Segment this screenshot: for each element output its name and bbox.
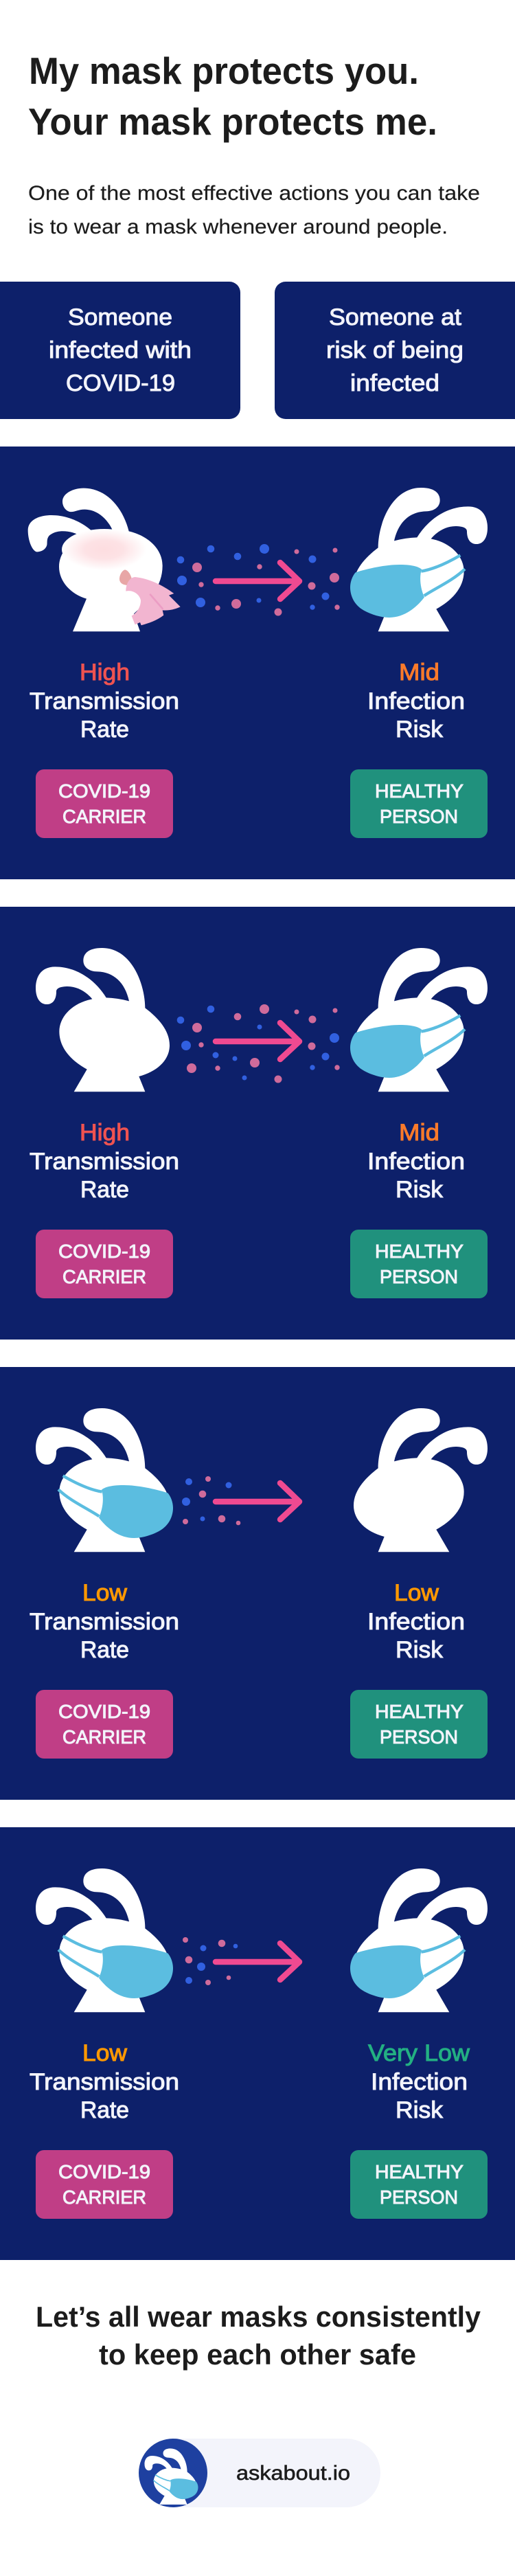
footer brand pill	[139, 2439, 380, 2507]
right risk label: Risk	[396, 1177, 444, 1203]
right risk label	[367, 1120, 465, 1203]
right risk label: Infection	[367, 1149, 465, 1175]
right risk label: Mid	[399, 659, 439, 686]
badge: healthy person: HEALTHY	[375, 780, 464, 802]
left rate label	[30, 1120, 179, 1203]
left rate label: Low	[82, 2040, 127, 2066]
panel: low transmission, low infection	[0, 1367, 515, 1800]
badge: covid-19 carrier: CARRIER	[62, 1266, 146, 1287]
left rate label: Transmission	[30, 1609, 179, 1635]
badge: healthy person: HEALTHY	[375, 1701, 464, 1722]
card: someone infected: infected with	[49, 337, 192, 363]
title: My mask protects you.	[29, 49, 419, 92]
panel: low transmission, very low infection	[0, 1827, 515, 2260]
badge: healthy person	[350, 769, 488, 838]
intro text: is to wear a mask whenever around people.	[28, 216, 448, 238]
panel: high transmission, mid infection (no carrier mask)	[0, 907, 515, 1340]
card: someone at risk: Someone at	[329, 304, 462, 330]
left rate label: High	[80, 659, 130, 686]
icon: masked healthy rabbit	[350, 948, 488, 1092]
icon: masked healthy rabbit	[350, 1868, 488, 2012]
icon: masked carrier rabbit	[36, 1868, 173, 2012]
right risk label: Infection	[367, 688, 465, 714]
badge: covid-19 carrier	[36, 1230, 173, 1298]
badge: covid-19 carrier: COVID-19	[58, 2161, 150, 2182]
right risk label: Low	[394, 1580, 439, 1606]
badge: healthy person: PERSON	[380, 2187, 458, 2208]
card: someone at risk: risk of being	[326, 337, 464, 363]
badge: covid-19 carrier: COVID-19	[58, 1241, 150, 1262]
right risk label: Mid	[399, 1120, 439, 1146]
badge: healthy person	[350, 1230, 488, 1298]
right risk label: Infection	[371, 2069, 468, 2095]
left rate label: High	[80, 1120, 130, 1146]
left rate label: Rate	[80, 716, 129, 743]
right risk label	[367, 1580, 465, 1663]
left rate label: Transmission	[30, 1149, 179, 1175]
icon: unmasked healthy rabbit	[354, 1408, 488, 1552]
left rate label: Rate	[80, 1177, 129, 1203]
card: someone at risk	[275, 282, 515, 419]
closing message: Let’s all wear masks consistently	[36, 2301, 481, 2333]
badge: covid-19 carrier	[36, 769, 173, 838]
closing message: to keep each other safe	[99, 2338, 416, 2371]
right risk label: Risk	[396, 1637, 444, 1663]
card: someone at risk: infected	[350, 370, 439, 396]
left rate label: Rate	[80, 2097, 129, 2123]
arrow	[216, 1023, 299, 1059]
left rate label: Transmission	[30, 688, 179, 714]
droplets	[177, 1004, 340, 1083]
left rate label: Transmission	[30, 2069, 179, 2095]
badge: healthy person: PERSON	[380, 1726, 458, 1748]
badge: healthy person: HEALTHY	[375, 2161, 464, 2182]
left rate label	[30, 1580, 179, 1663]
badge: covid-19 carrier: CARRIER	[62, 1726, 146, 1748]
badge: covid-19 carrier: COVID-19	[58, 780, 150, 802]
intro text	[28, 182, 480, 238]
left rate label	[30, 659, 179, 743]
badge: covid-19 carrier: CARRIER	[62, 806, 146, 827]
right risk label: Very Low	[368, 2040, 470, 2066]
droplets	[182, 1476, 240, 1525]
title	[28, 49, 437, 143]
arrow	[216, 1943, 299, 1980]
left rate label	[30, 2040, 179, 2123]
badge: healthy person: PERSON	[380, 1266, 458, 1287]
right risk label: Risk	[396, 2097, 444, 2123]
icon: masked healthy rabbit	[350, 488, 488, 631]
badge: covid-19 carrier	[36, 2150, 173, 2219]
title: Your mask protects me.	[28, 100, 437, 143]
right risk label: Risk	[396, 716, 444, 743]
icon: sneezing rabbit with tissue	[28, 488, 181, 631]
left rate label: Low	[82, 1580, 127, 1606]
arrow	[216, 563, 299, 599]
badge: healthy person	[350, 1690, 488, 1759]
icon: unmasked carrier rabbit	[36, 948, 170, 1092]
right risk label: Infection	[367, 1609, 465, 1635]
badge: healthy person: PERSON	[380, 806, 458, 827]
badge: healthy person: HEALTHY	[375, 1241, 464, 1262]
badge: covid-19 carrier: COVID-19	[58, 1701, 150, 1722]
closing message	[36, 2301, 481, 2371]
right risk label	[367, 659, 465, 743]
card: someone infected: Someone	[68, 304, 172, 330]
right risk label	[368, 2040, 470, 2123]
brand name: askabout.io	[236, 2462, 350, 2485]
badge: healthy person	[350, 2150, 488, 2219]
droplets	[183, 1937, 238, 1985]
badge: covid-19 carrier	[36, 1690, 173, 1759]
arrow	[216, 1483, 299, 1519]
icon: masked carrier rabbit	[36, 1408, 173, 1552]
badge: covid-19 carrier: CARRIER	[62, 2187, 146, 2208]
droplets	[177, 544, 340, 615]
icon: logo rabbit	[139, 2439, 207, 2507]
panel: high transmission, mid infection (sneezing carrier)	[0, 447, 515, 879]
card: someone infected: COVID-19	[66, 370, 175, 396]
left rate label: Rate	[80, 1637, 129, 1663]
intro text: One of the most effective actions you can take	[28, 182, 480, 205]
card: someone infected	[0, 282, 240, 419]
